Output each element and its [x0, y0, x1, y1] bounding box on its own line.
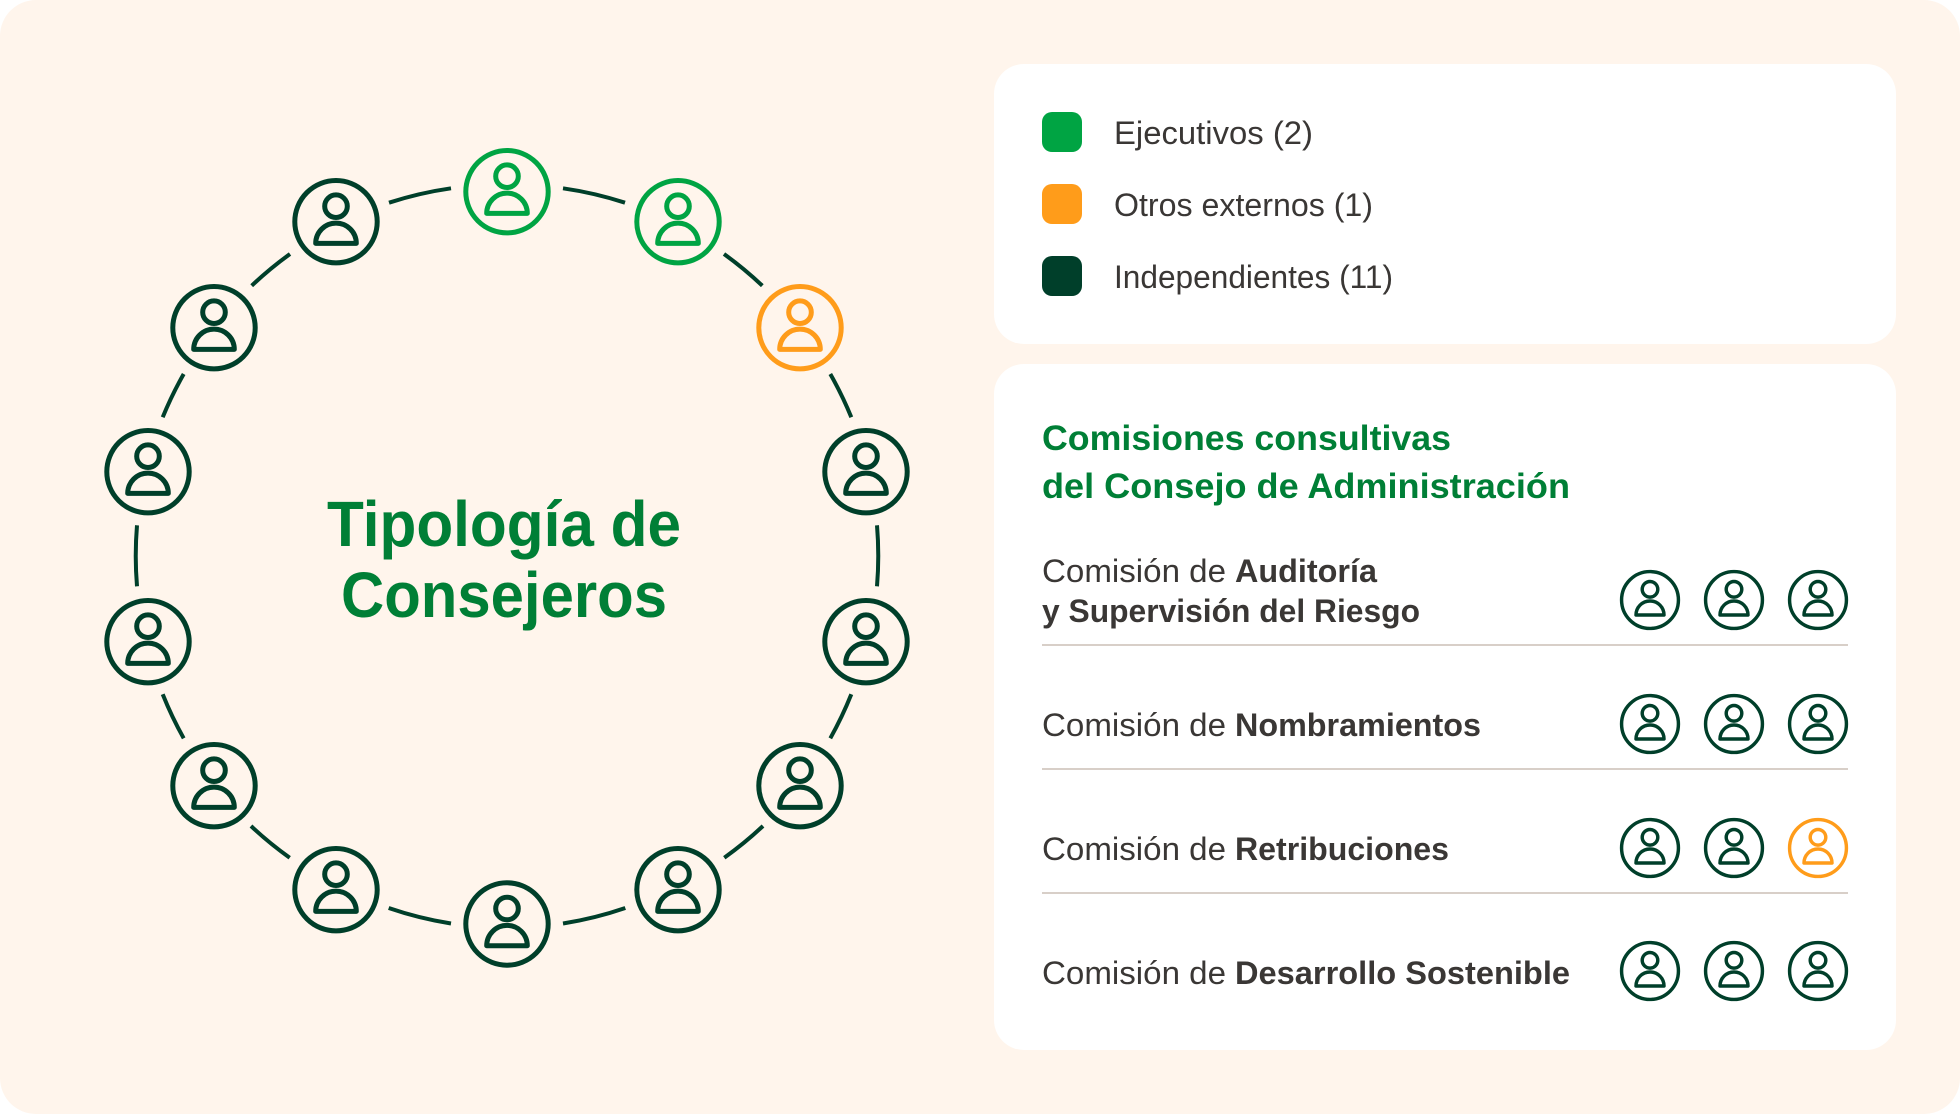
icon: independent member 11 — [295, 180, 377, 263]
icon: independent member 9 — [107, 430, 189, 513]
ring diagram: board members — [107, 150, 907, 965]
row: nombramientos: Comisión de — [1042, 707, 1226, 743]
icon: independent member 4 — [637, 848, 719, 931]
row: auditoría: y Supervisión del Riesgo — [1042, 593, 1420, 629]
legend item: ejecutivos: Ejecutivos (2) — [1114, 115, 1313, 151]
row: auditoría: Comisión de — [1042, 553, 1226, 589]
title: Consejeros — [341, 559, 667, 631]
icon group: nombramientos members — [1622, 696, 1846, 752]
icon: independent member 7 — [173, 744, 255, 827]
row: auditoría — [1042, 553, 1848, 646]
legend item: ejecutivos — [1042, 112, 1313, 152]
icon group: desarrollo sostenible members — [1622, 943, 1846, 999]
row: nombramientos — [1042, 696, 1848, 770]
legend item: otros externos: Otros externos (1) — [1114, 187, 1373, 223]
panel: comisiones — [994, 364, 1896, 1050]
heading: comisiones consultivas — [1042, 419, 1570, 506]
row: retribuciones: Comisión de — [1042, 831, 1226, 867]
icon group: retribuciones members — [1622, 820, 1846, 876]
icon: independent member 10 — [173, 286, 255, 369]
row: desarrollo sostenible: Desarrollo Sostenible — [1235, 955, 1570, 991]
row: retribuciones: Retribuciones — [1235, 831, 1449, 867]
icon: independent member 5 — [466, 883, 548, 965]
row: desarrollo sostenible — [1042, 943, 1846, 999]
icon: independent member 2 — [825, 600, 907, 683]
heading: comisiones consultivas: Comisiones consultivas — [1042, 419, 1451, 458]
icon: executive member 2 — [637, 180, 719, 263]
icon group: auditoría members — [1622, 572, 1846, 628]
ring connecting arcs — [136, 188, 878, 924]
panel: legend — [994, 64, 1896, 344]
icon: independent member 1 — [825, 430, 907, 513]
title: Tipología de — [327, 488, 681, 560]
icon: other external member — [759, 286, 841, 369]
row: desarrollo sostenible: Comisión de — [1042, 955, 1226, 991]
icon: independent member 8 — [107, 600, 189, 683]
title — [327, 488, 681, 631]
icon: executive member 1 — [466, 150, 548, 233]
heading: comisiones consultivas: del Consejo de Administración — [1042, 467, 1570, 506]
icon: independent member 3 — [759, 744, 841, 827]
row: nombramientos: Nombramientos — [1235, 707, 1481, 743]
icon: independent member 6 — [295, 848, 377, 931]
row: retribuciones — [1042, 820, 1848, 894]
legend item: independientes: Independientes (11) — [1114, 259, 1393, 295]
row: auditoría: Auditoría — [1235, 553, 1377, 589]
